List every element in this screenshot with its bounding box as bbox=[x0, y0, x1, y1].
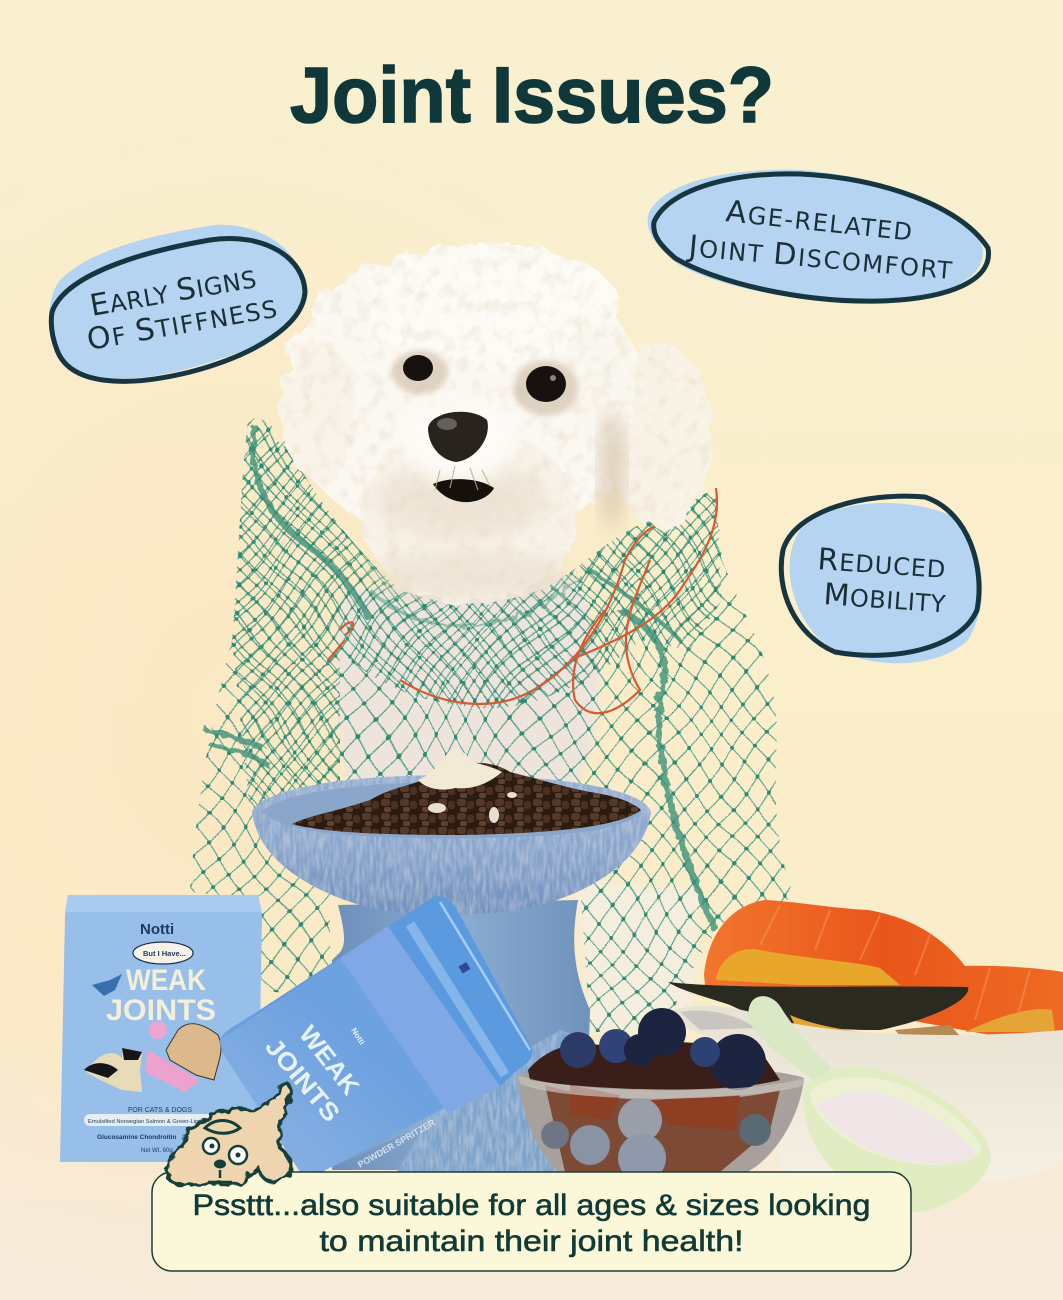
callout: suitable for all ages bbox=[152, 1172, 911, 1271]
callout: suitable for all ages: Pssttt...also suitable for all ages & sizes looking bbox=[192, 1189, 870, 1222]
callout: suitable for all ages: to maintain their joint health! bbox=[320, 1225, 744, 1258]
white bowl bbox=[672, 1006, 1063, 1182]
fishing net bbox=[190, 418, 791, 1032]
blueberries bbox=[541, 1008, 771, 1182]
topping bbox=[418, 750, 502, 790]
jar label: Notti bbox=[349, 1026, 367, 1047]
box text: FOR CATS & DOGS bbox=[128, 1107, 192, 1114]
callout: reduced mobility: REDUCED bbox=[816, 542, 947, 586]
box pill: but i have bbox=[133, 942, 193, 964]
jar label: POWDER SPRITZER bbox=[356, 1117, 437, 1170]
supplement jar bbox=[220, 896, 532, 1172]
jar label: JOINTS bbox=[259, 1033, 345, 1127]
box illustration bbox=[84, 974, 221, 1092]
callout: early signs of stiffness: EARLY SIGNS bbox=[87, 260, 259, 324]
callout: early signs of stiffness: OF STIFFNESS bbox=[84, 290, 279, 358]
box label pill bbox=[84, 1114, 264, 1126]
pedestal bbox=[332, 900, 590, 1170]
salmon and mussels bowl bbox=[668, 900, 1063, 1182]
jar lid bbox=[388, 896, 532, 1086]
dog mouth bbox=[433, 466, 494, 502]
dog mascot icon bbox=[167, 1085, 291, 1185]
box text: Notti bbox=[140, 921, 174, 938]
box text: WEAK bbox=[126, 964, 206, 997]
dog muzzle fur bbox=[400, 398, 520, 482]
dog body bbox=[336, 575, 700, 1032]
box text: JOINTS bbox=[106, 994, 216, 1027]
food bowl bbox=[252, 750, 651, 1175]
dog nose bbox=[428, 412, 488, 462]
jar label: WEAK bbox=[293, 1020, 365, 1101]
berries bowl bbox=[518, 1008, 804, 1182]
callout: age-related joint discomfort bbox=[648, 170, 989, 302]
callout: age-related joint discomfort: JOINT DISCOMFORT bbox=[685, 229, 954, 287]
dog head bbox=[280, 243, 712, 603]
box text: Glucosamine Chondroitin bbox=[97, 1134, 176, 1141]
product box bbox=[60, 895, 264, 1162]
jar label bbox=[259, 1020, 437, 1170]
box text: Emulsified Norwegian Salmon & Green-Lipped bbox=[88, 1119, 208, 1125]
box text: Net Wt. 60g bbox=[141, 1148, 173, 1154]
kibble bbox=[292, 762, 641, 835]
jar collar bbox=[340, 926, 500, 1114]
callout: reduced mobility bbox=[781, 496, 982, 663]
title: Joint Issues? bbox=[290, 50, 774, 139]
net bands bbox=[205, 425, 715, 930]
red rope on net bbox=[328, 488, 717, 713]
box text bbox=[88, 921, 216, 1154]
box text: But I Have... bbox=[143, 949, 186, 958]
spoon with powder bbox=[748, 996, 991, 1212]
callout: early signs of stiffness bbox=[50, 225, 305, 381]
callout: reduced mobility: MOBILITY bbox=[822, 577, 947, 621]
callout: age-related joint discomfort: AGE-RELATED bbox=[724, 194, 914, 249]
dog eyes bbox=[403, 355, 566, 402]
